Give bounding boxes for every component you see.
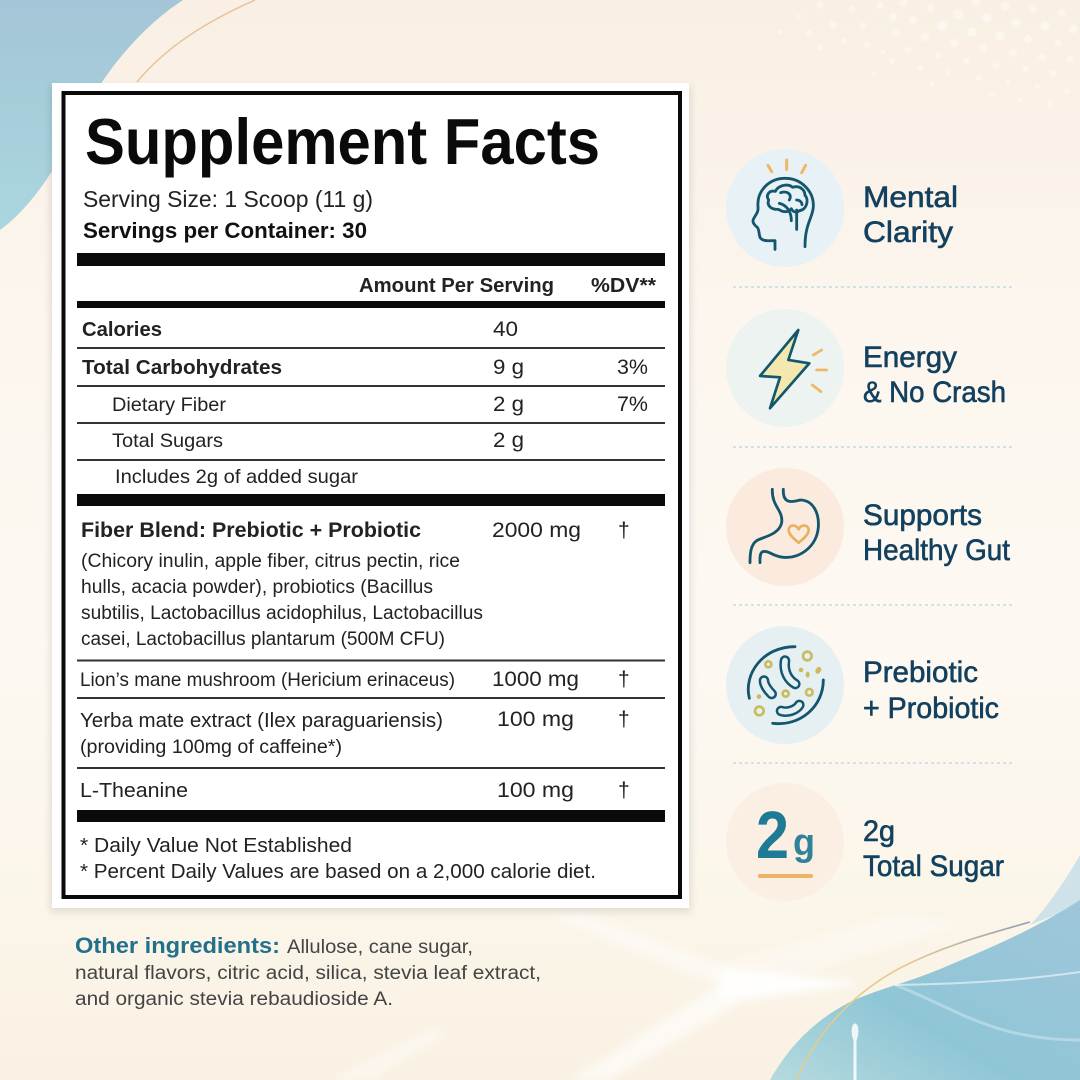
serving info bbox=[83, 186, 373, 243]
panel: supplement facts label bbox=[50, 83, 691, 912]
other ingredients: and organic stevia rebaudioside A. bbox=[75, 989, 393, 1010]
label: Mental bbox=[863, 181, 958, 214]
benefit: healthy gut bbox=[726, 468, 1011, 586]
row: lion's mane: 1000 mg bbox=[492, 668, 579, 691]
label: Energy bbox=[863, 341, 957, 374]
other ingredients: Allulose, cane sugar, bbox=[287, 937, 473, 958]
label: + Probiotic bbox=[863, 692, 999, 725]
row: lion's mane: † bbox=[618, 668, 630, 691]
icon: microbes bbox=[748, 647, 823, 724]
benefit: mental clarity bbox=[726, 149, 958, 267]
icon: 2g: g bbox=[793, 822, 815, 864]
label: Total Sugar bbox=[863, 850, 1004, 883]
row: l-theanine: † bbox=[618, 779, 630, 802]
column headers: %DV** bbox=[591, 275, 656, 297]
row: lion's mane: Lion’s mane mushroom (Hericium erinaceus) bbox=[80, 669, 455, 691]
row: fiber blend: casei, Lactobacillus plantarum (500M CFU) bbox=[81, 629, 445, 650]
label: & No Crash bbox=[863, 376, 1006, 409]
row: l-theanine: L-Theanine bbox=[80, 780, 188, 802]
row: fiber blend: 2000 mg bbox=[492, 519, 581, 542]
label bbox=[863, 341, 1006, 409]
row: fiber blend: (Chicory inulin, apple fiber, citrus pectin, rice bbox=[81, 551, 460, 572]
label: Clarity bbox=[863, 216, 953, 249]
other ingredients: natural flavors, citric acid, silica, stevia leaf extract, bbox=[75, 963, 541, 984]
row: l-theanine bbox=[80, 779, 630, 802]
row: yerba mate bbox=[80, 708, 630, 758]
icon: 2g bbox=[756, 798, 815, 878]
title: Supplement Facts bbox=[85, 105, 600, 178]
icon: 2g: 2 bbox=[756, 798, 789, 873]
row: yerba mate: Yerba mate extract (Ilex paraguariensis) bbox=[80, 710, 443, 732]
row: lion's mane bbox=[80, 668, 630, 691]
row: added sugar: Includes 2g of added sugar bbox=[115, 466, 359, 488]
serving info: Servings per Container: 30 bbox=[83, 218, 367, 243]
benefit: total sugar bbox=[726, 783, 1004, 901]
label bbox=[863, 499, 1011, 567]
column headers bbox=[359, 275, 656, 297]
icon: stomach with heart bbox=[750, 489, 818, 563]
label: Supports bbox=[863, 499, 982, 532]
footnotes: * Daily Value Not Established bbox=[80, 834, 352, 857]
row: calories: 40 bbox=[493, 318, 518, 341]
icon: head with brain bbox=[753, 160, 813, 249]
row: dietary fiber: 2 g bbox=[493, 393, 524, 416]
serving info: Serving Size: 1 Scoop (11 g) bbox=[83, 186, 373, 212]
row: yerba mate: (providing 100mg of caffeine*) bbox=[80, 737, 342, 758]
benefit: energy bbox=[726, 309, 1006, 427]
row: dietary fiber bbox=[112, 393, 648, 416]
footnotes: * Percent Daily Values are based on a 2,000 calorie diet. bbox=[80, 860, 596, 883]
row: total carbohydrates bbox=[82, 356, 648, 379]
other ingredients: Other ingredients: bbox=[75, 933, 280, 958]
label: Prebiotic bbox=[863, 656, 978, 689]
other ingredients bbox=[75, 933, 541, 1010]
label bbox=[863, 815, 1004, 883]
row: fiber blend: † bbox=[618, 519, 630, 542]
row: dietary fiber: Dietary Fiber bbox=[112, 394, 227, 416]
column headers: Amount Per Serving bbox=[359, 275, 554, 297]
row: yerba mate: † bbox=[618, 708, 630, 731]
label: Healthy Gut bbox=[863, 534, 1011, 567]
row: calories: Calories bbox=[82, 319, 162, 341]
benefit: prebiotic and probiotic bbox=[726, 626, 999, 744]
row: fiber blend bbox=[81, 519, 630, 650]
row: fiber blend: subtilis, Lactobacillus acidophilus, Lactobacillus bbox=[81, 603, 483, 624]
row: calories bbox=[82, 318, 518, 341]
row: total carbohydrates: 9 g bbox=[493, 356, 524, 379]
row: l-theanine: 100 mg bbox=[497, 779, 574, 802]
label bbox=[863, 181, 958, 249]
footnotes bbox=[80, 834, 596, 883]
row: total carbohydrates: 3% bbox=[617, 356, 648, 379]
icon: lightning bolt bbox=[760, 330, 827, 408]
row: total sugars: Total Sugars bbox=[112, 430, 223, 452]
row: yerba mate: 100 mg bbox=[497, 708, 574, 731]
row: total carbohydrates: Total Carbohydrates bbox=[82, 357, 282, 379]
row: fiber blend: Fiber Blend: Prebiotic + Probiotic bbox=[81, 519, 421, 542]
label bbox=[863, 656, 999, 725]
label: 2g bbox=[863, 815, 895, 848]
row: fiber blend: hulls, acacia powder), probiotics (Bacillus bbox=[81, 577, 433, 598]
row: total sugars: 2 g bbox=[493, 429, 524, 452]
row: dietary fiber: 7% bbox=[617, 393, 648, 416]
row: total sugars bbox=[112, 429, 524, 452]
